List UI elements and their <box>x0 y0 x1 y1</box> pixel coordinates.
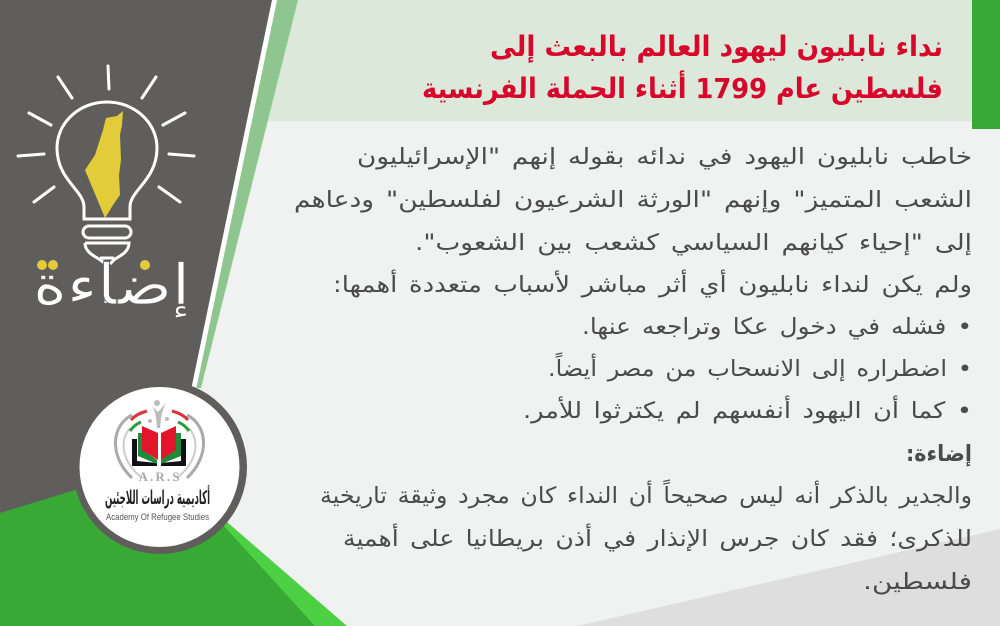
panel: grey corner <box>577 529 1000 626</box>
panel: dark grey side panel <box>0 0 272 520</box>
text block: body: • كما أن اليهود أنفسهم لم يكترثوا للأمر. <box>523 395 972 424</box>
logo: Academy of Refugee Studies badge <box>73 380 247 554</box>
logo emblem <box>115 400 204 478</box>
text block: body: ولم يكن لنداء نابليون أي أثر مباشر لأسباب متعددة أهمها: <box>333 269 972 298</box>
panel: bright green wedge <box>200 500 347 626</box>
panel: green side tab <box>972 0 1000 129</box>
text block: body: • فشله في دخول عكا وتراجعه عنها. <box>582 314 972 340</box>
text block: body: خاطب نابليون اليهود في ندائه بقوله إنهم "الإسرائيليون <box>357 144 972 170</box>
bulb base <box>83 226 131 238</box>
text block: body <box>294 144 972 595</box>
heading: idaa logotype: إضاءة <box>33 253 190 319</box>
bulb rays <box>18 66 194 202</box>
text block: body: الشعب المتميز" وإنهم "الورثة الشرعيون لفلسطين" ودعاهم <box>294 187 972 213</box>
heading: title: نداء نابليون ليهود العالم بالبعث إلى <box>490 30 943 64</box>
heading: title <box>422 30 943 105</box>
text block: body: • اضطراره إلى الانسحاب من مصر أيضاً. <box>548 352 972 382</box>
panel: dark green wedge <box>0 461 315 626</box>
logo initials: A.R.S <box>138 469 180 484</box>
text block: body: إلى "إحياء كيانهم السياسي كشعب بين الشعوب". <box>415 230 972 256</box>
panel: title band <box>260 0 972 121</box>
text block: body: للذكرى؛ فقد كان جرس الإنذار في أذن بريطانيا على أهمية <box>343 523 972 552</box>
icon: light bulb with map <box>18 66 194 303</box>
text block: body: فلسطين. <box>863 569 972 595</box>
map of Palestine <box>85 111 123 218</box>
text block: body: إضاءة: <box>906 441 972 467</box>
bulb glass <box>57 102 157 219</box>
text block: body: والجدير بالذكر أنه ليس صحيحاً أن النداء كان مجرد وثيقة تاريخية <box>320 479 972 509</box>
panel: white diagonal stripe <box>191 0 277 390</box>
logo: Academy of Refugee Studies badge: أكاديمية دراسات اللاجئين <box>105 485 210 509</box>
panel: pale green diagonal stripe <box>196 0 298 388</box>
bulb cup <box>85 243 129 303</box>
yellow dots <box>37 260 150 270</box>
logo English name: Academy Of Refugee Studies <box>106 512 209 522</box>
heading: title: فلسطين عام 1799 أثناء الحملة الفرنسية <box>422 70 943 105</box>
